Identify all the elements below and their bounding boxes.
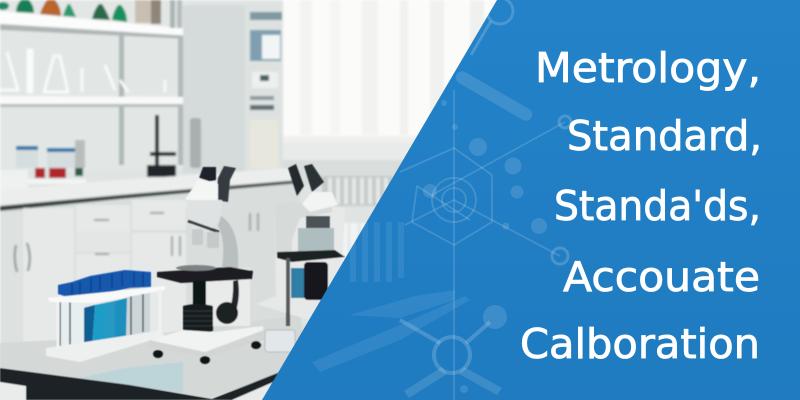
blue diagonal panel (262, 0, 800, 400)
headline text: Calboration (520, 320, 760, 368)
headline text: Metrology, (535, 44, 761, 92)
molecule lines (400, 90, 565, 400)
lower cabinets (0, 183, 300, 350)
small bottle and stand on back counter (147, 115, 201, 177)
tubes glass (126, 274, 150, 338)
headline text (520, 44, 762, 368)
reagent bottles on back counter (0, 140, 86, 194)
pill rod (456, 71, 532, 121)
radiator (322, 176, 392, 206)
glass tubes behind right microscope (330, 223, 368, 273)
arm (218, 216, 238, 268)
headline text: Standard, (567, 112, 762, 160)
headline text: Accouate (563, 253, 760, 301)
liquid in tubes (84, 305, 95, 348)
instrument cabinet (183, 5, 283, 173)
focus knob and bellows (216, 302, 238, 324)
rack (47, 286, 165, 303)
back counter (0, 168, 300, 211)
eyepieces (199, 167, 216, 182)
microscope left (149, 166, 264, 364)
window with blinds (283, 0, 503, 185)
microscope right (256, 164, 345, 352)
glassware on middle shelf (0, 50, 165, 92)
wall shelving (0, 0, 190, 170)
counter reflection (80, 362, 183, 393)
ghost glassware and bench (312, 222, 470, 372)
head and objectives (186, 200, 222, 232)
headline text: Standa'ds, (554, 182, 761, 230)
test tube rack (46, 270, 165, 362)
coloured bottles on top shelf (0, 0, 182, 28)
base (150, 326, 264, 355)
stage (157, 267, 253, 283)
ghosted lab watermark (312, 0, 571, 400)
blue caps (58, 270, 151, 299)
foreground counter (0, 315, 305, 400)
